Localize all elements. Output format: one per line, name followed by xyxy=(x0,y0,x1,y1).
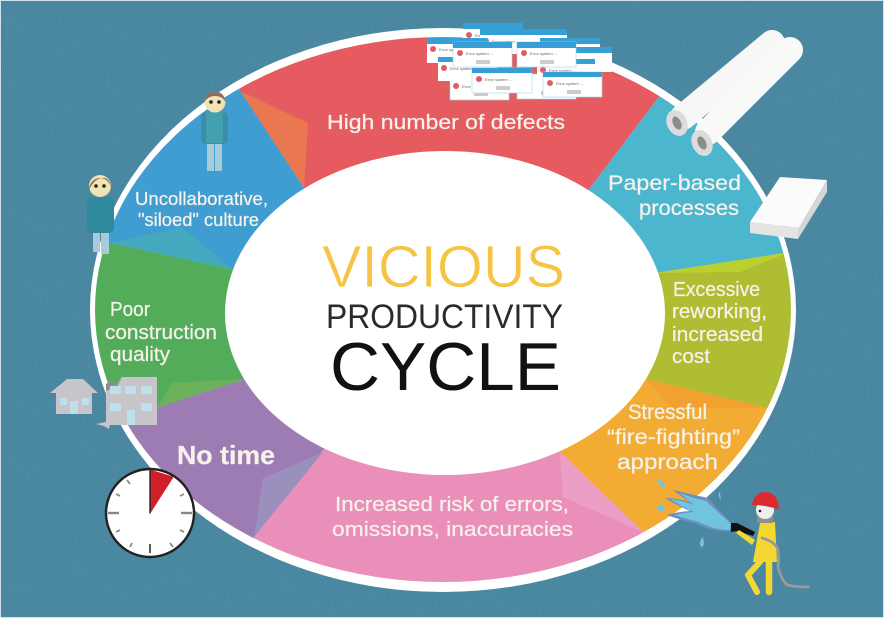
label: errors xyxy=(332,494,573,541)
segment: reworking xyxy=(646,253,791,408)
label: fire-fighting: “fire-fighting” xyxy=(607,426,740,449)
title: VICIOUS xyxy=(322,234,565,300)
label: culture xyxy=(135,189,268,230)
segment: fire-fighting xyxy=(560,379,768,532)
segment: culture xyxy=(109,88,304,270)
label: errors: omissions, inaccuracies xyxy=(332,519,573,541)
icon: error windows: Error system xyxy=(439,47,462,52)
label: no time: No time xyxy=(177,440,275,470)
icon: error windows: Error system .... xyxy=(450,66,478,71)
label: culture: "siloed" culture xyxy=(138,210,259,230)
label: fire-fighting xyxy=(607,401,740,474)
water jet xyxy=(657,479,731,547)
icon: error windows: Error system .... xyxy=(556,81,584,86)
label: culture: Uncollaborative, xyxy=(135,189,268,209)
icon: damaged building xyxy=(96,377,157,429)
icon: error windows: Error system .... xyxy=(475,33,503,38)
icon: error windows: Error system .... xyxy=(549,68,577,73)
label: paper: processes xyxy=(639,197,739,220)
label: reworking xyxy=(672,279,767,368)
label: quality: construction xyxy=(105,322,217,344)
icon: error windows: Error system .... xyxy=(485,77,513,82)
icon: paper stack xyxy=(750,177,827,239)
label: reworking: increased xyxy=(672,324,763,346)
icon: firefighter with hose xyxy=(657,479,808,592)
icon: error windows: Error system .... xyxy=(530,51,558,56)
icon: error windows xyxy=(427,23,612,100)
label: quality: Poor xyxy=(110,299,150,321)
icon: error windows: Error system .... xyxy=(492,39,520,44)
icon: paper rolls xyxy=(662,43,790,159)
label: quality: quality xyxy=(110,344,170,366)
segment: paper xyxy=(588,96,784,272)
label: defects: High number of defects xyxy=(327,112,565,134)
icon: error windows: Error system .... xyxy=(466,51,494,56)
label: reworking: Excessive xyxy=(673,279,760,301)
label: paper xyxy=(608,172,741,220)
title xyxy=(322,234,565,405)
segment: defects xyxy=(238,37,660,190)
icon: error windows: Error system xyxy=(462,84,485,89)
label: fire-fighting: Stressful xyxy=(628,401,707,424)
white ring outer ellipse xyxy=(90,28,796,592)
segment: errors xyxy=(254,448,644,582)
icon: person top xyxy=(201,92,228,171)
label: reworking: reworking, xyxy=(672,301,767,323)
title: CYCLE xyxy=(330,329,561,405)
icon: clock xyxy=(106,469,194,557)
title: PRODUCTIVITY xyxy=(326,298,563,336)
label: paper: Paper-based xyxy=(608,172,741,195)
segment: quality xyxy=(95,242,244,408)
cycle segments xyxy=(95,37,791,582)
segment: no time xyxy=(128,379,324,538)
centre white ellipse xyxy=(225,151,665,475)
label: errors: Increased risk of errors, xyxy=(335,494,569,516)
label: reworking: cost xyxy=(672,346,710,368)
label: fire-fighting: approach xyxy=(617,451,718,474)
icon: person left xyxy=(87,175,114,254)
icon: small house xyxy=(50,379,98,414)
label: quality xyxy=(105,299,217,366)
